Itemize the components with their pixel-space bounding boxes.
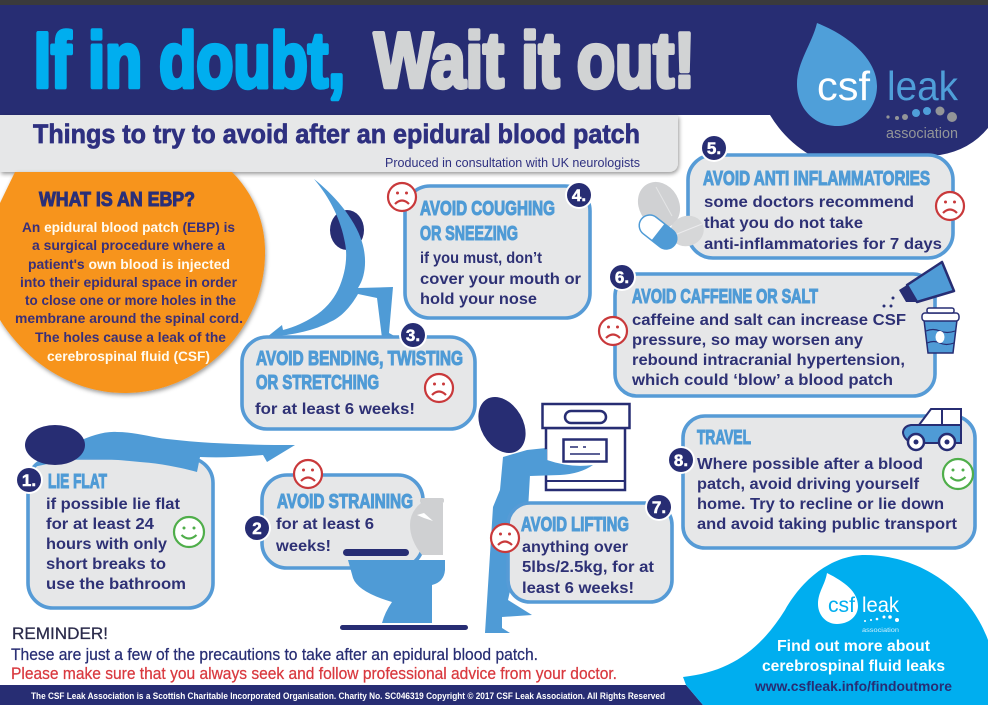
footer bar (0, 685, 703, 705)
logo: small white (818, 573, 899, 634)
panel 5: anti inflammatories: that you do not take (704, 215, 863, 232)
top dark strip (0, 0, 988, 5)
panel 5: anti inflammatories: anti-inflammatories for 7 days (704, 236, 942, 253)
panel: find out more: Find out more about (777, 638, 930, 655)
panel: what is an EBP (0, 172, 265, 393)
icon: sad face (491, 524, 519, 552)
credit line: Produced in consultation with UK neurologists (385, 156, 640, 170)
logo: small white: csf (828, 594, 855, 617)
panel 1: lie flat: use the bathroom (46, 576, 186, 593)
panel 4: coughing or sneezing (388, 181, 593, 318)
EBP description: cerebrospinal fluid (CSF) (47, 348, 210, 364)
logo: csf leak association: leak (887, 63, 958, 109)
panel: find out more: www.csfleak.info/findoutmore (754, 678, 952, 694)
footer bar: The CSF Leak Association is a Scottish Charitable Incorporated Organisation. Charity No. SC046319 Copyright © 2017 CSF Leak Association. All Rights Reserved (31, 691, 665, 701)
header banner (0, 5, 988, 155)
panel 7: lifting: least 6 weeks! (522, 580, 634, 597)
panel 1: lie flat: for at least 24 (46, 516, 154, 533)
panel 7: lifting (491, 493, 673, 602)
badge 2: 2 (252, 519, 262, 538)
icon: salt shaker (882, 262, 954, 308)
logo: csf leak association: association (886, 126, 958, 142)
panel 1: lie flat (15, 425, 295, 608)
badge 2 (243, 514, 271, 542)
reminder text: These are just a few of the precautions to take after an epidural blood patch. (11, 645, 538, 664)
panel 6: caffeine or salt: rebound intracranial hypertension, (632, 352, 905, 369)
panel 3: bending, twisting or stretching (242, 321, 475, 429)
panel: find out more (683, 555, 988, 705)
panel 8: travel: patch, avoid driving yourself (697, 476, 920, 493)
EBP description: An epidural blood patch (EBP) is (22, 219, 235, 235)
panel 2: straining (243, 460, 423, 568)
panel 8: travel: TRAVEL (697, 427, 751, 449)
badge 8: 8. (674, 451, 688, 470)
icon: stretching figure (267, 179, 398, 338)
panel 4: coughing or sneezing: cover your mouth or (420, 271, 581, 288)
logo: csf leak association: csf (817, 63, 871, 109)
reminder text: REMINDER! (12, 624, 108, 643)
icon: sad face (936, 192, 964, 220)
icon: pills (630, 174, 708, 253)
icon: coffee cup (922, 308, 959, 353)
badge 3: 3. (406, 326, 420, 345)
icon: lying figure (25, 425, 295, 472)
title: Wait it out: Wait it out! (374, 16, 695, 104)
EBP description: membrane around the spinal cord. (15, 310, 243, 326)
subtitle band (0, 115, 678, 172)
badge 7 (645, 493, 673, 521)
badge 3 (399, 321, 427, 349)
icon: sad face (294, 460, 322, 488)
icon: happy face (943, 459, 973, 489)
panel 6: caffeine or salt: which could ‘blow’ a blood patch (631, 372, 893, 389)
logo: small white: leak (862, 594, 899, 617)
panel 4: coughing or sneezing: AVOID COUGHING (420, 198, 555, 220)
panel 1: lie flat: LIE FLAT (48, 471, 107, 493)
badge 8 (667, 446, 695, 474)
panel 7: lifting: anything over (522, 539, 628, 556)
panel: find out more: cerebrospinal fluid leaks (762, 658, 945, 675)
badge 1: 1. (22, 471, 36, 490)
title: If in doubt: If in doubt, (34, 16, 345, 104)
panel 2: straining: weeks! (275, 538, 331, 555)
badge 4 (565, 181, 593, 209)
panel 8: travel: Where possible after a blood (697, 456, 923, 473)
reminder text: Please make sure that you always seek and follow professional advice from your doctor. (11, 664, 617, 683)
subtitle: Things to try to avoid after an epidural blood patch (33, 119, 640, 149)
panel 1: lie flat: if possible lie flat (46, 496, 180, 513)
panel 6: caffeine or salt: caffeine and salt can increase CSF (632, 312, 906, 329)
icon: sad face (388, 183, 416, 211)
panel 5: anti inflammatories (688, 134, 964, 258)
EBP description: into their epidural space in order (20, 274, 238, 290)
panel 3: bending, twisting or stretching: for at least 6 weeks! (255, 401, 415, 418)
logo: small white: association (862, 627, 899, 634)
EBP description: The holes cause a leak of the (35, 329, 226, 345)
icon: sad face (425, 374, 453, 402)
panel 2: straining: AVOID STRAINING (277, 491, 413, 513)
panel 3: bending, twisting or stretching: OR STRETCHING (256, 372, 379, 394)
badge 5 (700, 134, 728, 162)
badge 1 (15, 466, 43, 494)
panel 3: bending, twisting or stretching: AVOID BENDING, TWISTING (256, 348, 463, 370)
EBP description: a surgical procedure where a (32, 237, 225, 253)
EBP description (15, 219, 243, 364)
logo: csf leak association (797, 23, 958, 142)
panel 4: coughing or sneezing: OR SNEEZING (420, 223, 518, 245)
icon: box (530, 404, 630, 490)
panel 8: travel: home. Try to recline or lie down (697, 496, 944, 513)
badge 7: 7. (652, 498, 666, 517)
panel 6: caffeine or salt: pressure, so may worsen any (632, 332, 863, 349)
panel 8: travel: and avoid taking public transport (697, 516, 957, 533)
panel 5: anti inflammatories: some doctors recommend (704, 194, 914, 211)
panel 2: straining: for at least 6 (276, 516, 374, 533)
panel 1: lie flat: hours with only (46, 536, 167, 553)
EBP heading: WHAT IS AN EBP? (39, 189, 195, 211)
panel 8: travel (667, 409, 975, 548)
panel 4: coughing or sneezing: if you must, don’t (420, 250, 542, 267)
badge 4: 4. (572, 186, 586, 205)
icon: happy face (174, 517, 204, 547)
panel 6: caffeine or salt (599, 263, 935, 396)
badge 6: 6. (615, 268, 629, 287)
icon: sad face (599, 317, 627, 345)
panel 1: lie flat: short breaks to (46, 556, 166, 573)
icon: lifting figure body (469, 389, 593, 633)
panel 4: coughing or sneezing: hold your nose (420, 291, 537, 308)
panel 7: lifting: AVOID LIFTING (521, 514, 629, 536)
badge 5: 5. (707, 139, 721, 158)
EBP description: patient's own blood is injected (28, 256, 230, 272)
badge 6 (608, 263, 636, 291)
panel 6: caffeine or salt: AVOID CAFFEINE OR SALT (632, 286, 818, 308)
icon: toilet (340, 498, 468, 630)
reminder text (11, 624, 617, 683)
icon: car (903, 409, 961, 450)
EBP description: to close one or more holes in the (25, 292, 236, 308)
panel 7: lifting: 5lbs/2.5kg, for at (522, 559, 654, 576)
